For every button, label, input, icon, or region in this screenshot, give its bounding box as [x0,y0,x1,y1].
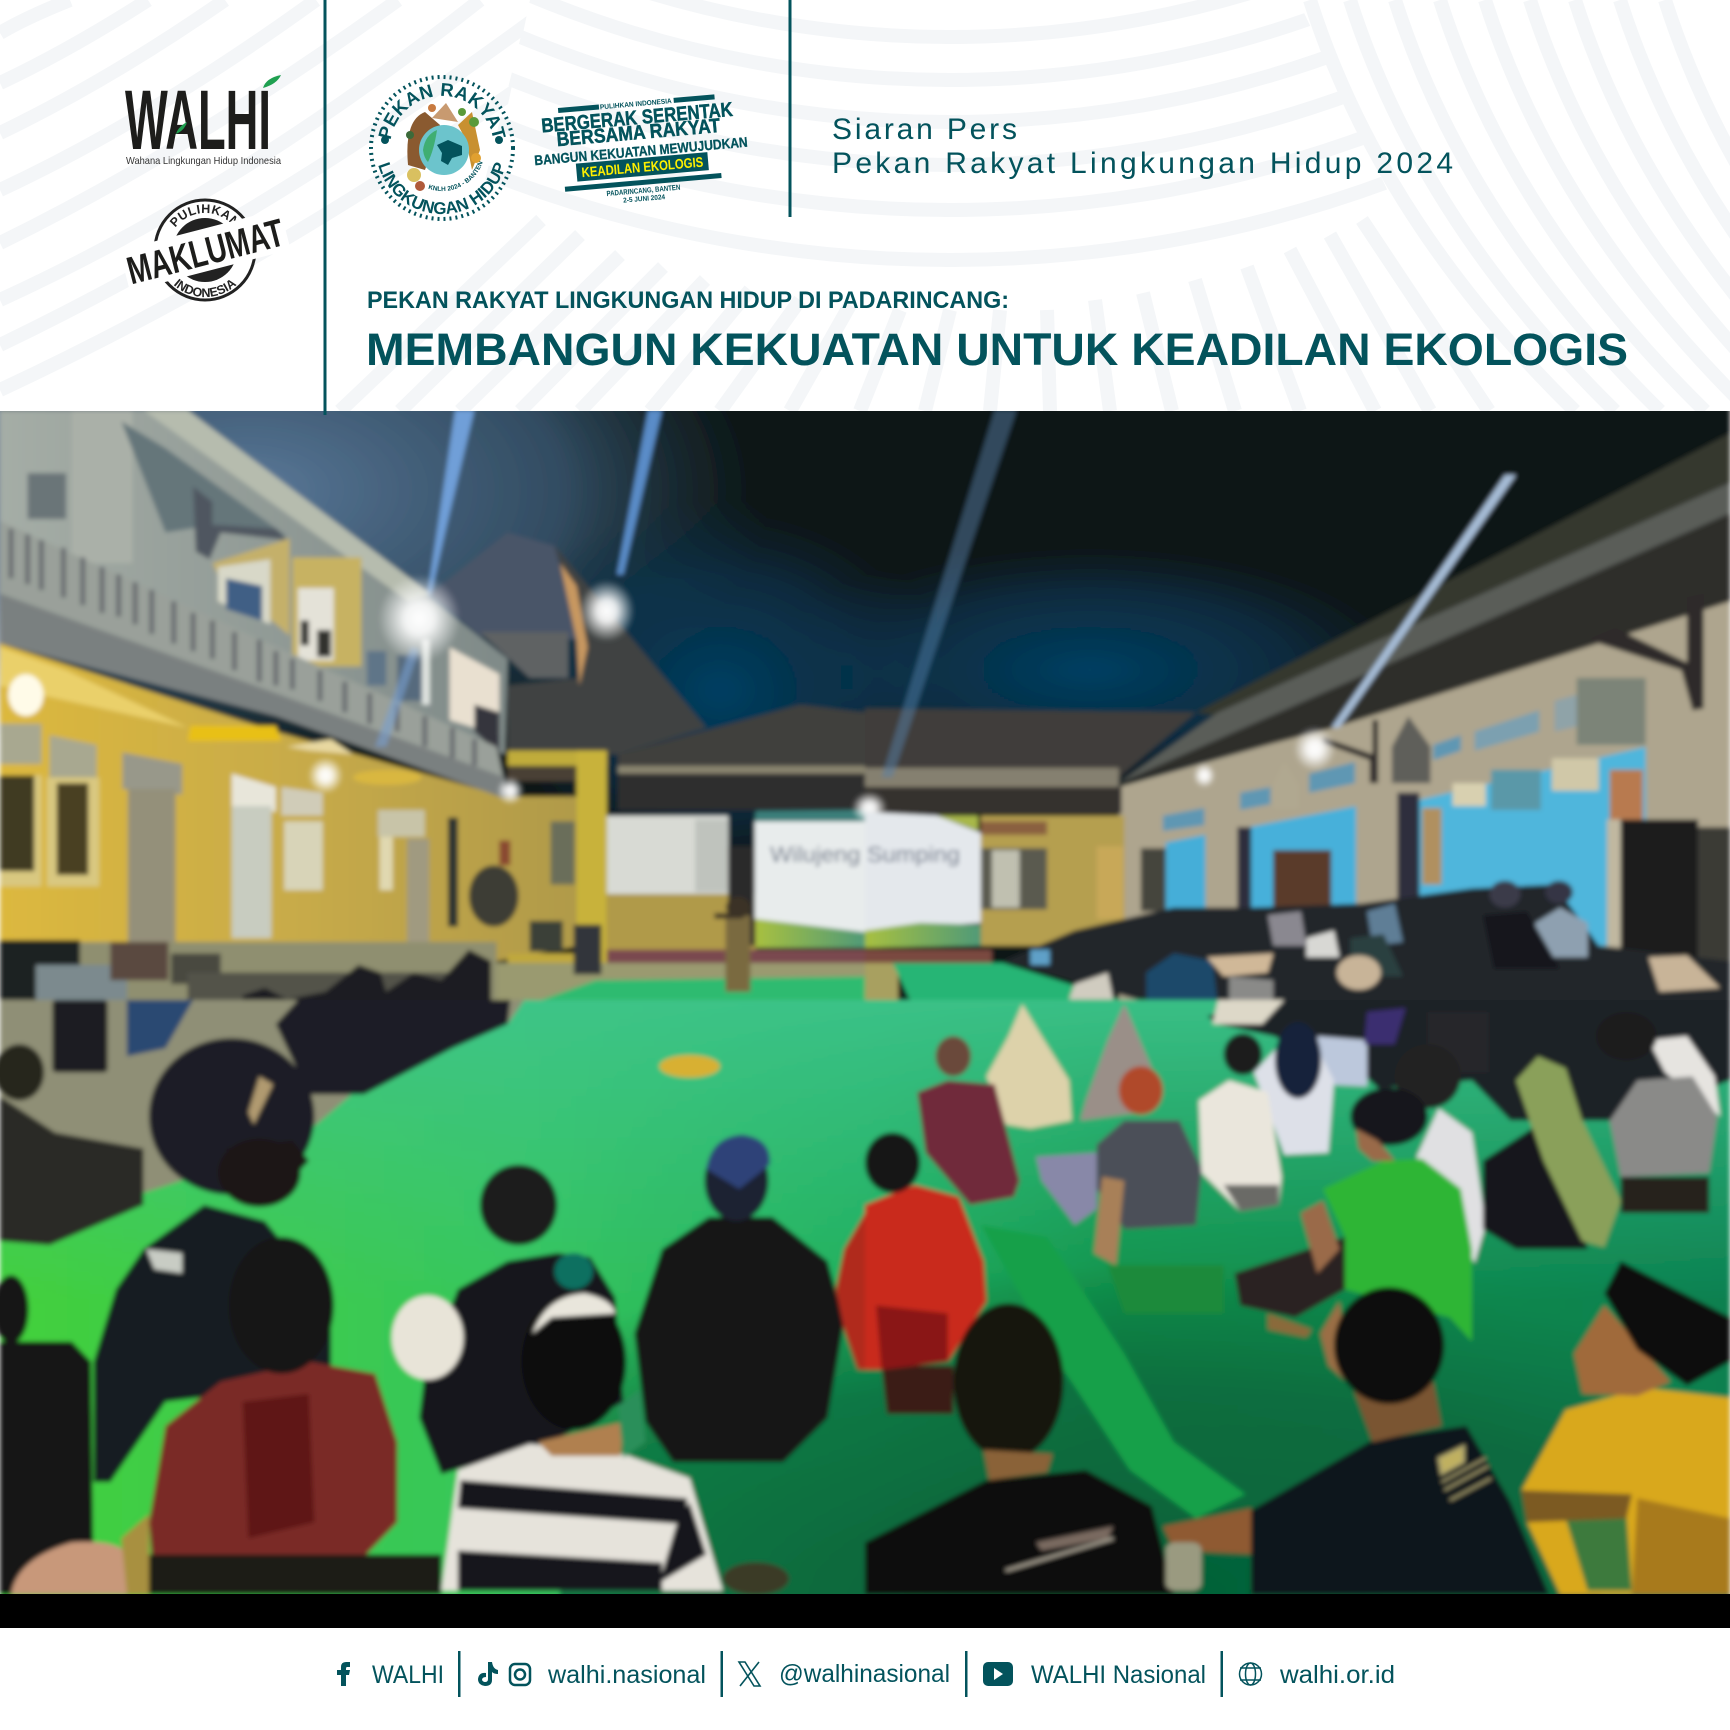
balcony beam and railing [0,521,505,798]
person in red shirt [121,1237,441,1595]
yellow pillar and beam [508,751,607,973]
stage banner left half [607,810,865,965]
foreground left quadrant: audience [0,1000,865,1595]
instagram and tiktok handle: walhi.nasional [547,1661,706,1689]
press release label: Pekan Rakyat Lingkungan Hidup 2024 [832,147,1453,180]
logo: Pulihkan Maklumat Indonesia stamp [123,198,289,302]
logo: Pekan Rakyat Lingkungan Hidup badge: LINGKUNGAN HIDUP [378,162,504,214]
man in white shirt [1199,1033,1282,1211]
sky light beams left [428,410,662,598]
icon: youtube [983,1662,1013,1686]
logo: Bergerak Serentak campaign lockup: PADARINCANG, BANTEN [606,183,681,198]
right roof [1119,433,1730,783]
WALHI tagline: Wahana Lingkungan Hidup Indonesia [126,155,281,167]
man in navy shirt [1163,1287,1549,1595]
ground floor yellow wall [0,643,756,965]
bottom figures right [723,1563,789,1595]
website: walhi.or.id [1279,1661,1395,1689]
stage banner right half [865,812,992,963]
man with curly hair [865,1303,1174,1595]
subtitle: PEKAN RAKYAT LINGKUNGAN HIDUP DI PADARINCANG: [367,287,1009,314]
green leaf accents [176,75,281,134]
sky [0,411,1730,1004]
man in grey shirt [1036,1066,1202,1265]
lamps and glow [8,575,634,805]
photo: night gathering in the courtyard [0,411,1730,1594]
right building wall [1119,598,1730,1010]
central roof left half [618,705,865,810]
banner greeting text: Wilujeng Sumping [770,842,960,867]
person in striped shirt [441,1293,723,1591]
white curtain [607,816,755,946]
logo: Bergerak Serentak campaign lockup: BERGERAK SERENTAK [540,99,734,137]
harvest illustration [406,103,481,191]
floor fold [981,1225,1246,1518]
X handle: @walhinasional [779,1660,950,1688]
green floor cover [0,1000,1730,1600]
logo: Pekan Rakyat Lingkungan Hidup badge: KNLH 2024 - BANTEN [428,161,483,192]
footer social links [337,1651,1395,1697]
woman beige hijab [986,1004,1072,1129]
logo: Bergerak Serentak campaign lockup: BANGUN KEKUATAN MEWUJUDKAN [534,134,748,168]
seated row at left edge [0,1000,510,1245]
plate of offerings [659,1055,720,1078]
middle man with white bag [392,1165,623,1474]
facebook name: WALHI [372,1661,444,1689]
blue rooms [1141,747,1646,946]
ground floor windows and doors [0,724,575,946]
press release label: Siaran Pers [832,113,1017,146]
tall rear roof [430,532,706,754]
header background line pattern [0,0,1730,411]
man in yellow shirt [1522,1261,1730,1595]
youtube name: WALHI Nasional [1031,1661,1206,1689]
central roof right half [865,709,1196,814]
press release label [832,113,1453,180]
logo: Pulihkan Maklumat Indonesia stamp: MAKLUMAT [123,212,289,293]
logo: Bergerak Serentak campaign lockup: PULIHKAN INDONESIA [600,98,672,111]
speaker at the podium [714,897,750,992]
logo: Bergerak Serentak campaign lockup: 2-5 JUNI 2024 [623,194,666,205]
logo: Pekan Rakyat Lingkungan Hidup badge [369,75,515,221]
icon: facebook [337,1662,350,1686]
logo: Bergerak Serentak campaign lockup [530,92,752,212]
logo: Pulihkan Maklumat Indonesia stamp: INDONESIA [174,278,236,298]
logo: Pulihkan Maklumat Indonesia stamp: PULIHKAN [170,204,239,227]
clerestory windows [1160,694,1578,833]
loudspeaker [1621,819,1730,984]
upper storey [0,410,508,754]
man in white behind green shirt [1395,1044,1486,1263]
red hoodie edge [836,1213,865,1370]
left building and stage quadrant [0,410,865,1010]
back yellow wall and window [981,816,1124,946]
woman with green hijab [1483,1056,1621,1249]
person in red hoodie [865,1133,986,1414]
icon: globe [1240,1663,1262,1685]
back crowd [1207,1000,1730,1121]
main title: MEMBANGUN KEKUATAN UNTUK KEADILAN EKOLOGIS [366,324,1628,375]
logo: Bergerak Serentak campaign lockup: BERSAMA RAKYAT [556,115,721,151]
man in grey t-shirt [1596,1012,1717,1213]
vertical divider header [788,0,792,217]
brackets and hanging cages [1321,606,1706,786]
far right seated crowd [865,881,1730,1010]
divider [720,1651,723,1697]
light beams and lamps [852,410,1516,824]
globe [419,125,469,175]
ground, grass edge and bags [0,921,865,1010]
man in green shirt [1235,1088,1472,1342]
foreground left shoulders [11,1514,149,1595]
icon: tiktok [478,1662,498,1686]
vertical divider left [324,0,326,415]
black strip under photo [0,1594,1730,1628]
logo: WALHI [125,73,281,167]
woman in white with navy hijab [1254,1022,1334,1155]
divider [1220,1651,1223,1697]
icon: X [739,1662,760,1686]
right building quadrant [852,410,1730,1010]
concrete floor [0,1000,524,1193]
icon: instagram [510,1664,530,1685]
cap woman [94,1139,331,1482]
divider [458,1651,460,1697]
dark figure at left [0,1275,94,1595]
WALHI wordmark: WALHI [125,73,271,167]
badge side dots [381,136,389,144]
divider [965,1651,968,1697]
woman grey clothes [1080,1004,1152,1121]
person in maroon [917,1036,1019,1205]
logo: Bergerak Serentak campaign lockup: KEADILAN EKOLOGIS [581,154,704,180]
man with blue cap [634,1135,844,1462]
foreground right quadrant: audience [865,1000,1730,1595]
badge text: PEKAN RAKYAT [378,83,506,139]
